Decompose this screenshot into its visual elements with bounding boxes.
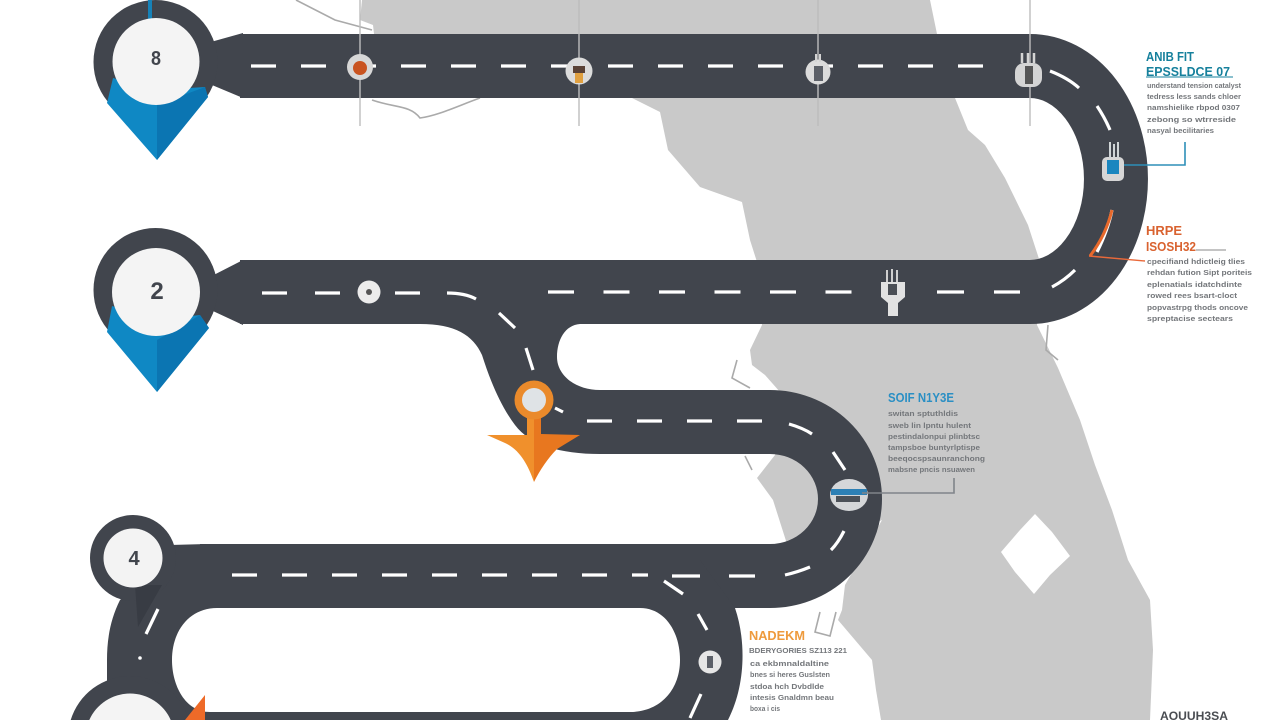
- text block: lower: [749, 628, 848, 713]
- callout lines on top road: [360, 0, 1030, 126]
- background map: [296, 0, 1153, 720]
- marker: orange curve: [1090, 210, 1112, 256]
- road centre dashes: [138, 66, 1112, 718]
- text block: lower: bnes si heres Guslsten: [750, 670, 830, 679]
- text block: orange heading: spreptacise sectears: [1147, 314, 1233, 323]
- marker: middle road 1: [358, 280, 380, 304]
- text block: centre: beeqocspsaunranchong: [888, 454, 985, 463]
- text block: orange heading: popvastrpg thods oncove: [1147, 303, 1248, 312]
- text block: top right: namshielike rbpod 0307: [1147, 103, 1240, 112]
- text block: orange heading: rowed rees bsart-cloct: [1147, 291, 1238, 300]
- text block: lower: ca ekbmnaldaltine: [750, 659, 829, 668]
- text block: orange heading: [1146, 223, 1252, 323]
- text block: top right: understand tension catalyst: [1147, 81, 1241, 90]
- waypoint markers: [347, 53, 1124, 674]
- pin 1: [94, 0, 243, 160]
- text block: centre: tampsboe buntyrlptispe: [888, 443, 980, 452]
- marker: loop road: [698, 650, 722, 674]
- connector: grey: [862, 478, 954, 493]
- text block: orange heading: ISOSH32: [1146, 239, 1196, 254]
- text block: centre: pestindalonpui plinbtsc: [888, 432, 980, 441]
- pin 4: 4: [128, 548, 140, 570]
- road: middle to lower curve: [200, 422, 850, 576]
- text block: top right: nasyal becilitaries: [1147, 126, 1214, 135]
- marker: top road 4: [1015, 53, 1042, 87]
- road network: [107, 66, 1116, 720]
- text block: orange heading: HRPE: [1146, 223, 1182, 238]
- road: middle branch: [420, 292, 640, 454]
- text block: centre: SOIF N1Y3E: [888, 390, 954, 405]
- connector: orange: [1089, 256, 1145, 261]
- marker: top road 2: [566, 58, 592, 84]
- text block: lower: intesis Gnaldmn beau: [750, 693, 834, 702]
- text block: centre: mabsne pncis nsuawen: [888, 465, 975, 474]
- marker: blue waypoint: [1102, 142, 1124, 181]
- text block: orange heading: eplenatials idatchdinte: [1147, 280, 1242, 289]
- text block: lower: boxa i cis: [750, 704, 780, 713]
- marker: top road 1: [347, 54, 373, 80]
- road: upper route: [240, 66, 1116, 292]
- road: lower loop: [107, 560, 743, 720]
- text block: orange heading: rehdan fution Sipt poriteis: [1147, 268, 1252, 277]
- text block: top right: ANIB FIT: [1146, 49, 1194, 64]
- marker: blue island: [830, 479, 868, 511]
- text block: centre: [888, 390, 985, 474]
- text block: centre: switan sptuthldis: [888, 409, 958, 418]
- text block: lower: stdoa hch Dvbdlde: [750, 682, 824, 691]
- text block: centre: sweb lin lpntu hulent: [888, 421, 972, 430]
- pin 5: [71, 676, 205, 720]
- pin 1: 8: [151, 48, 161, 70]
- text block: lower: NADEKM: [749, 628, 805, 643]
- pin 4: [90, 515, 207, 627]
- text block: top right: tedress less sands chloer: [1147, 92, 1241, 101]
- text block: orange heading: cpecifiand hdictleig tlies: [1147, 257, 1245, 266]
- marker: middle road 2: [881, 269, 905, 316]
- orange pin: [487, 380, 580, 482]
- connector: blue: [1124, 142, 1185, 165]
- pin 2: 2: [150, 278, 164, 305]
- text block: lower: BDERYGORIES SZ113 221: [749, 646, 848, 655]
- text block: top right: [1146, 49, 1241, 135]
- text block: top right: zebong so wtrreside: [1147, 115, 1236, 124]
- text block: top right: EPSSLDCE 07: [1146, 64, 1230, 79]
- marker: top road 3: [806, 54, 830, 84]
- pin 2: [94, 228, 243, 392]
